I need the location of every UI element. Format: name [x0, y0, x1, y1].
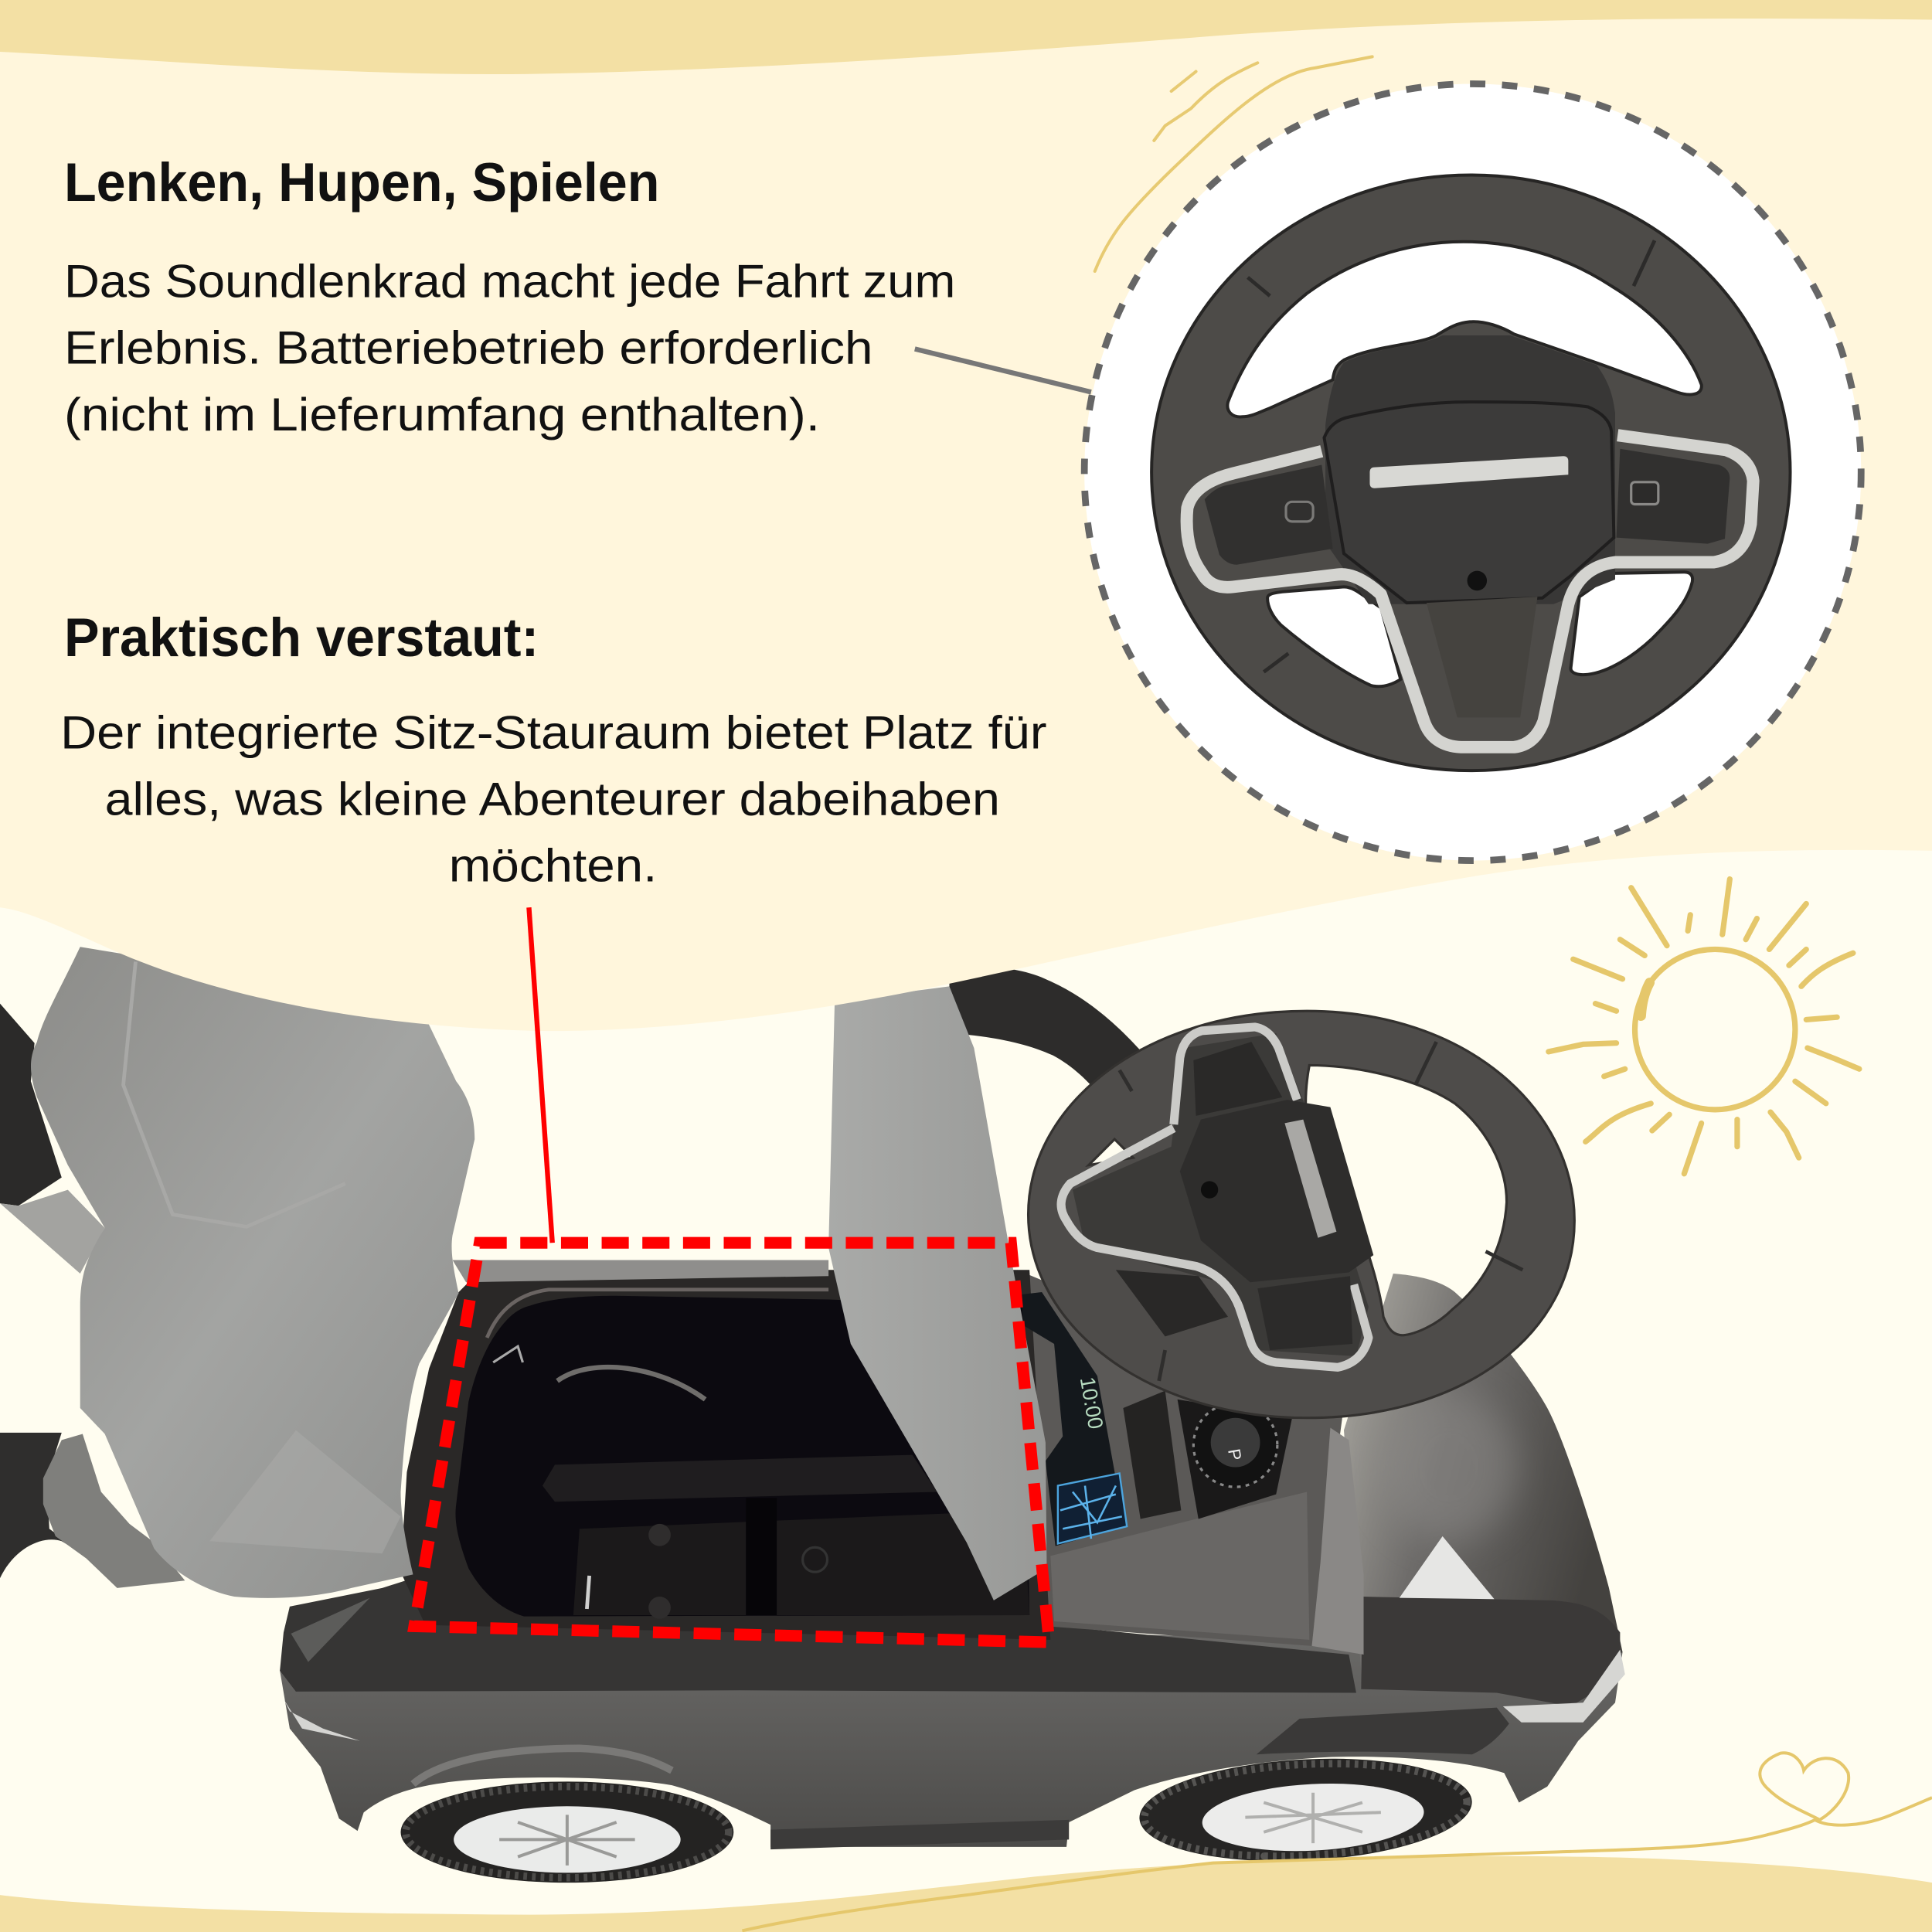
text block: steering description: Erlebnis. Batteriebetrieb erforderlich — [64, 322, 873, 374]
screen: navigation display — [1021, 1292, 1127, 1546]
cream top panel — [0, 19, 1932, 1031]
text block: steering heading: Lenken, Hupen, Spielen — [64, 151, 660, 213]
lower spoke — [1427, 597, 1537, 718]
bonnet — [1344, 1274, 1623, 1689]
highlight: dashed red storage frame — [414, 1243, 1049, 1642]
text block: storage description: alles, was kleine Abenteurer dabeihaben — [105, 774, 1000, 825]
text block: storage description — [60, 706, 1046, 892]
air vent — [1123, 1391, 1181, 1519]
dashboard panel — [1017, 1270, 1344, 1646]
ring seams — [1120, 1042, 1522, 1381]
arc handle behind steering wheel — [949, 967, 1153, 1147]
silver trim — [1061, 1027, 1369, 1367]
running board — [770, 1820, 1069, 1849]
bonnet highlight — [1400, 1536, 1495, 1599]
decorative sketch lines near circle — [1095, 56, 1372, 271]
screen: navigation display: 10:00 — [1076, 1375, 1108, 1431]
connector line: text to steering wheel — [915, 349, 1091, 392]
deck corner sheen — [291, 1598, 370, 1662]
right seat back — [828, 986, 1046, 1600]
instrument cluster: P — [1224, 1447, 1245, 1462]
headlight — [1503, 1650, 1625, 1723]
left control pad — [1205, 464, 1333, 565]
storage well surround — [401, 1270, 1050, 1640]
left seat — [31, 947, 474, 1598]
ring seams — [1248, 240, 1655, 672]
horn bar — [1369, 456, 1568, 488]
gold bottom band — [0, 1856, 1932, 1932]
icon: heart with flourish line — [742, 1753, 1932, 1930]
icon: steering wheel on car — [1029, 1011, 1574, 1418]
lever in lower opening — [1116, 1270, 1228, 1336]
horn pad — [1324, 402, 1614, 603]
icon: steering wheel close-up — [1151, 175, 1791, 770]
callout circle — [1084, 83, 1861, 861]
text block: storage description: Der integrierte Sitz-Stauraum bietet Platz für — [60, 706, 1046, 758]
storage rim band — [453, 1260, 828, 1282]
dash lower sheen — [1050, 1492, 1309, 1640]
wheel ring — [1029, 1011, 1574, 1418]
product photo: ride-on car — [0, 947, 1625, 1883]
callout line: text to storage — [529, 907, 553, 1243]
wheel: rear tyre — [401, 1781, 733, 1883]
horn dot — [1468, 571, 1487, 590]
icon: sun — [1549, 879, 1859, 1174]
central hub — [1180, 1100, 1373, 1282]
text block: steering description: Das Soundlenkrad macht jede Fahrt zum — [64, 255, 955, 307]
rear push handle — [0, 1004, 185, 1588]
spoke interior — [1073, 1033, 1369, 1356]
instrument cluster — [1178, 1400, 1292, 1519]
hub dot — [1201, 1181, 1218, 1199]
text block: storage description: möchten. — [449, 840, 657, 892]
rear wheel arch lip — [413, 1748, 672, 1784]
wheel ring — [1151, 175, 1791, 770]
right control pad — [1617, 449, 1730, 544]
side dark panel — [1257, 1708, 1509, 1754]
rear tail light — [284, 1699, 360, 1741]
bonnet sheen — [1381, 1393, 1516, 1541]
bonnet lower panel — [1361, 1597, 1620, 1706]
car body side — [280, 1615, 1623, 1847]
lever visible below car steering wheel — [1114, 1267, 1232, 1338]
text block: steering description — [64, 255, 955, 440]
right pad button — [1631, 482, 1658, 505]
lower control pad — [1257, 1276, 1352, 1350]
gold top band — [0, 0, 1932, 148]
hub — [1325, 335, 1615, 604]
left pad button — [1286, 502, 1313, 522]
dashboard pillar — [1312, 1427, 1364, 1655]
text block: steering description: (nicht im Lieferumfang enthalten). — [64, 389, 820, 440]
wheel: front tyre — [1137, 1750, 1475, 1869]
silver trim — [1187, 435, 1753, 747]
silver logo bar — [1284, 1120, 1336, 1238]
text block: storage heading: Praktisch verstaut: — [64, 607, 539, 668]
top deck strip — [280, 1578, 1356, 1692]
storage well interior — [455, 1290, 1029, 1619]
upper control pad — [1193, 1042, 1282, 1116]
